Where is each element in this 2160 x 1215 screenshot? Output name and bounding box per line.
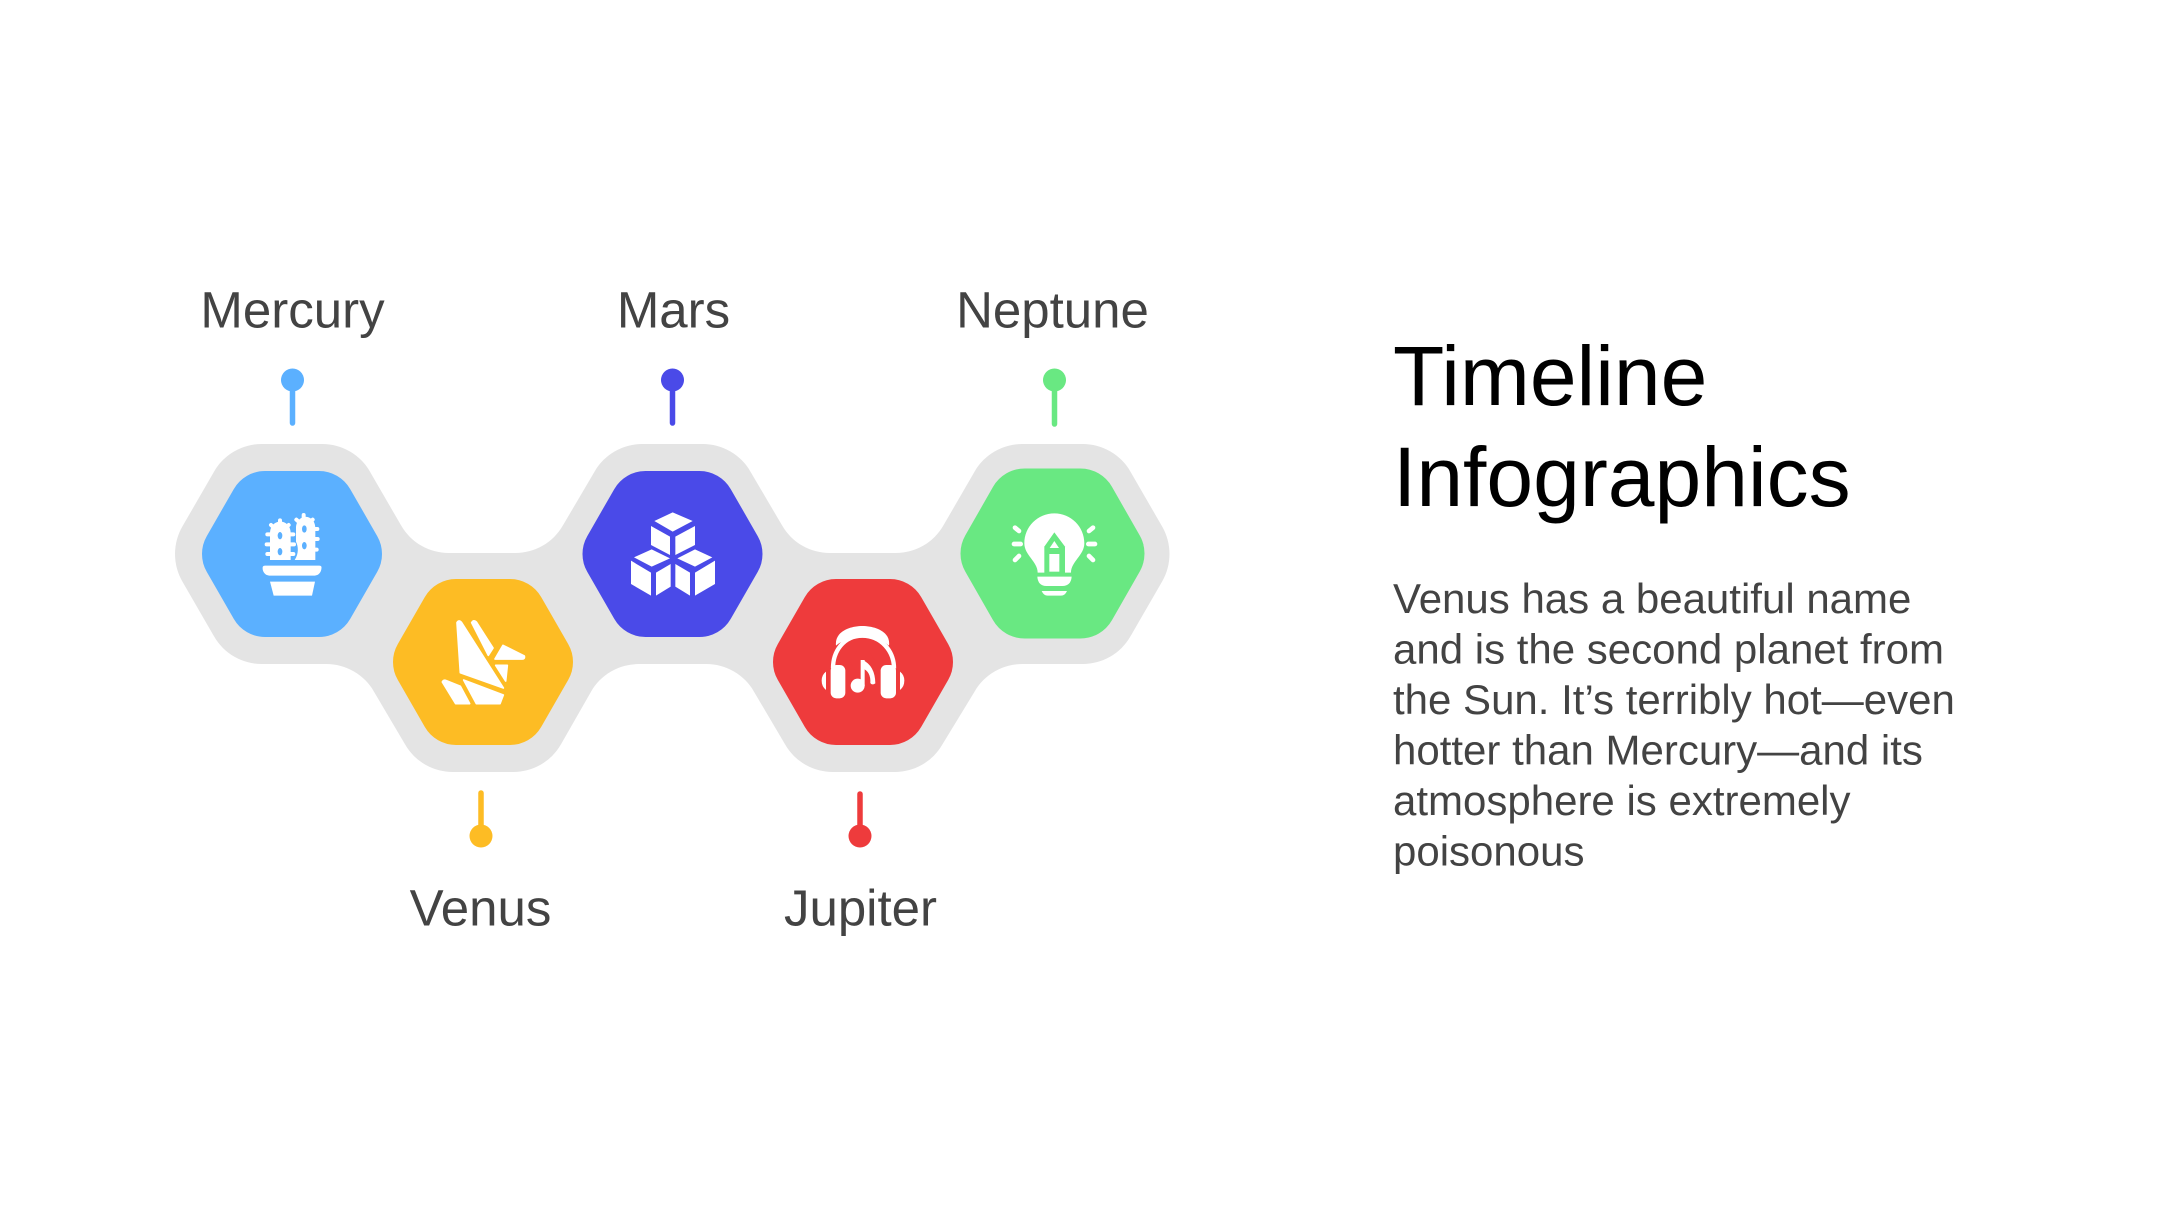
hexagon: Neptune — [997, 505, 1108, 602]
step: Venus — [410, 615, 551, 936]
timeline track: grey hexagon band — [175, 444, 1169, 772]
body text: Venus has a beautiful name — [1393, 575, 1911, 622]
label: Jupiter: Jupiter — [784, 880, 937, 936]
hexagon: Mars — [618, 507, 726, 601]
pin: Mars — [661, 368, 684, 423]
pin: Venus — [470, 793, 492, 848]
icon: headphones with music note — [822, 626, 904, 698]
body text: atmosphere is extremely — [1393, 777, 1851, 824]
body text: poisonous — [1393, 828, 1584, 874]
icon: stacked cubes — [631, 512, 715, 596]
body text: the Sun. It’s terribly hot—even — [1393, 676, 1955, 723]
step: Jupiter — [784, 615, 937, 936]
icon: light bulb with pencil — [1014, 513, 1095, 596]
body text: and is the second planet from — [1393, 626, 1944, 672]
pin: Mercury — [281, 368, 304, 423]
step: Mars — [617, 282, 730, 601]
pin: Neptune — [1043, 368, 1066, 424]
label: Mercury: Mercury — [200, 282, 385, 338]
icon: cactus in pot — [263, 515, 322, 596]
icon: origami bird — [442, 621, 524, 704]
body text: hotter than Mercury—and its — [1393, 726, 1923, 774]
hexagon: Venus — [429, 615, 537, 709]
label: Neptune: Neptune — [956, 282, 1149, 338]
hexagon: Jupiter — [809, 615, 917, 709]
step: Mercury — [200, 282, 385, 601]
title: Timeline — [1393, 329, 1707, 423]
label: Mars: Mars — [617, 282, 730, 338]
step: Neptune — [956, 282, 1149, 602]
title: Infographics — [1393, 430, 1851, 524]
hexagon: Mercury — [238, 507, 346, 601]
pin: Jupiter — [848, 794, 872, 848]
label: Venus: Venus — [410, 880, 551, 936]
